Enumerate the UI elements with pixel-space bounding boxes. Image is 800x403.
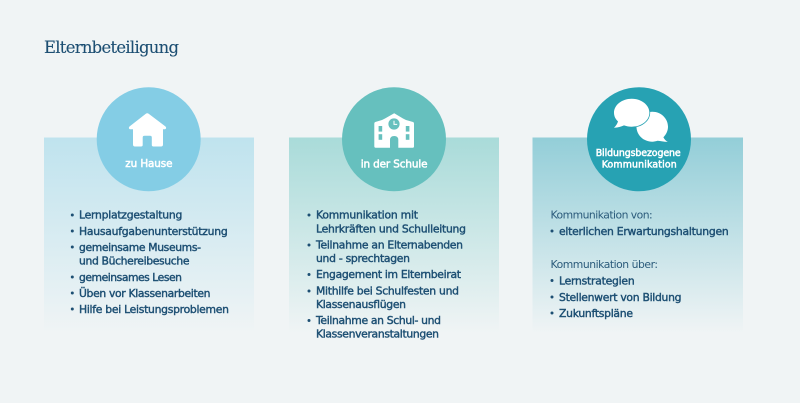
icon: house xyxy=(129,113,166,146)
text: Kommunikation über: Kommunikation über: xyxy=(550,258,658,271)
list: zu Hause: gemeinsames Lesen xyxy=(79,271,182,284)
list: in der Schule xyxy=(308,209,466,341)
circle: zu Hause xyxy=(97,87,201,191)
list: Kommunikation von: elterlichen Erwartungshaltungen xyxy=(559,225,729,238)
list: zu Hause: Hilfe bei Leistungsproblemen xyxy=(79,303,229,316)
panel: Bildungsbezogene Kommunikation xyxy=(532,87,743,334)
label: Bildungsbezogene Kommunikation xyxy=(596,148,681,170)
list: zu Hause: gemeinsame Museums- xyxy=(79,241,201,254)
panel: in der Schule xyxy=(289,87,499,341)
list: zu Hause xyxy=(71,209,229,316)
list: Kommunikation über: Lernstrategien xyxy=(559,274,635,288)
list: zu Hause: und Büchereibesuche xyxy=(79,254,190,268)
list: in der Schule: und - sprechtagen xyxy=(316,252,410,265)
list: in der Schule: Kommunikation mit xyxy=(316,209,418,222)
text: Kommunikation von: Kommunikation von: xyxy=(550,209,653,222)
title: Elternbeteiligung xyxy=(44,38,180,57)
icon: speech bubbles xyxy=(614,99,668,142)
list: in der Schule: Engagement im Elternbeirat xyxy=(316,268,461,281)
label: Bildungsbezogene Kommunikation: Bildungsbezogene xyxy=(596,148,681,159)
list: Kommunikation über: Zukunftspläne xyxy=(559,307,633,320)
list: in der Schule: Teilnahme an Schul- und xyxy=(315,314,441,327)
list: in der Schule: Klassenausflügen xyxy=(316,298,406,311)
panel: zu Hause xyxy=(44,87,254,334)
label: in der Schule: in der Schule xyxy=(361,158,428,170)
list: in der Schule: Klassenveranstaltungen xyxy=(316,328,439,341)
label: zu Hause: zu Hause xyxy=(125,158,172,170)
label: Bildungsbezogene Kommunikation: Kommunikation xyxy=(602,159,677,170)
list: Kommunikation über: Stellenwert von Bildung xyxy=(559,291,682,304)
list: zu Hause: Hausaufgabenunterstützung xyxy=(79,225,228,238)
circle: in der Schule xyxy=(342,87,446,191)
circle: Bildungsbezogene Kommunikation xyxy=(587,87,691,191)
list: Kommunikation über xyxy=(550,274,682,320)
icon: school building xyxy=(374,113,414,148)
list: in der Schule: Teilnahme an Elternabenden xyxy=(315,239,463,252)
list: in der Schule: Mithilfe bei Schulfesten und xyxy=(316,284,459,298)
list: zu Hause: Üben vor Klassenarbeiten xyxy=(79,287,210,300)
list: zu Hause: Lernplatzgestaltung xyxy=(79,209,182,222)
list: in der Schule: Lehrkräften und Schulleitung xyxy=(316,222,466,236)
